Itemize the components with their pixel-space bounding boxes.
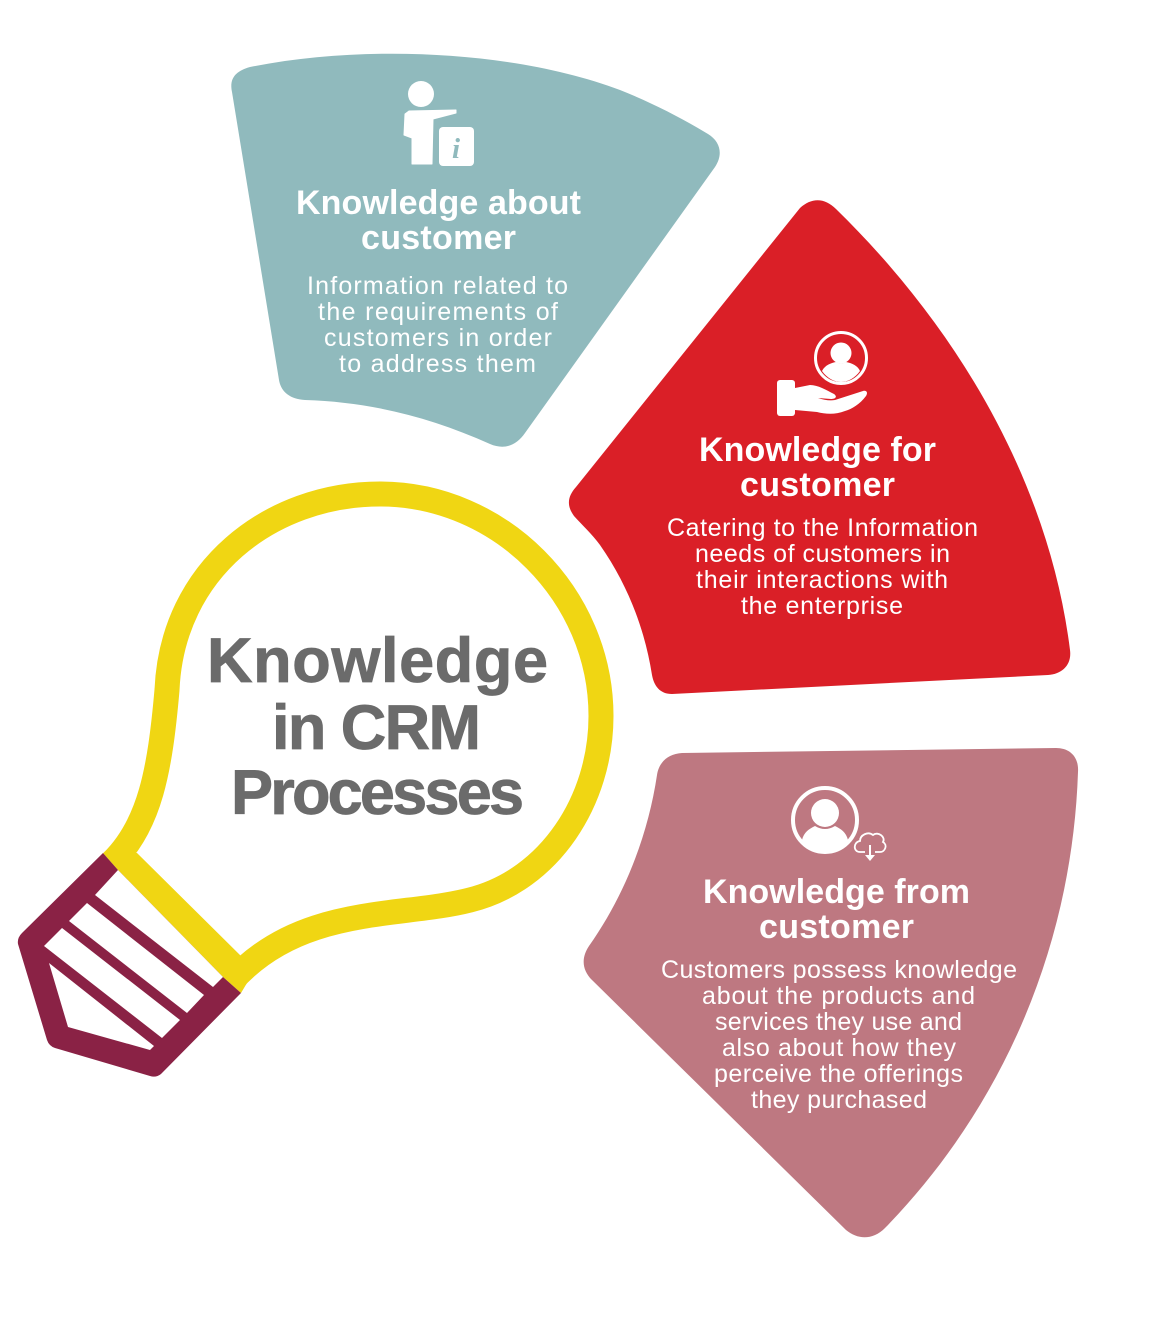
description: services they use and (715, 1008, 962, 1036)
bulb socket (18, 853, 241, 1077)
panel: knowledge about customer (231, 54, 720, 447)
description: needs of customers in (695, 540, 950, 568)
heading: customer (740, 466, 895, 504)
description: the enterprise (741, 592, 903, 620)
description: also about how they (722, 1034, 956, 1062)
description: Information related to (307, 272, 568, 300)
description: to address them (339, 350, 536, 378)
heading: Knowledge about (296, 184, 581, 222)
heading: customer (759, 908, 914, 946)
heading: Knowledge from (703, 873, 970, 911)
bulb outline (112, 494, 601, 981)
description: Catering to the Information (667, 514, 978, 542)
description: Customers possess knowledge (661, 956, 1017, 984)
bulb base band (103, 853, 262, 993)
rose petal shape (584, 748, 1078, 1237)
icon: person with info sign: i (452, 133, 460, 165)
description: their interactions with (696, 566, 948, 594)
panel: knowledge for customer (569, 200, 1070, 694)
icon: hand holding person (777, 332, 867, 416)
description: perceive the offerings (714, 1060, 963, 1088)
teal petal shape (231, 54, 720, 447)
description: the requirements of (318, 298, 558, 326)
icon: person with cloud download (793, 788, 886, 861)
icon: person with info sign (404, 81, 474, 166)
description: about the products and (702, 982, 975, 1010)
title: in CRM (272, 693, 481, 763)
heading: customer (361, 219, 516, 257)
panel: knowledge from customer (584, 748, 1078, 1237)
description: they purchased (751, 1086, 927, 1114)
title: Processes (231, 758, 524, 828)
title: Knowledge (207, 626, 548, 696)
light bulb (18, 494, 601, 1077)
heading: Knowledge for (699, 431, 936, 469)
description: customers in order (324, 324, 552, 352)
red petal shape (569, 200, 1070, 694)
